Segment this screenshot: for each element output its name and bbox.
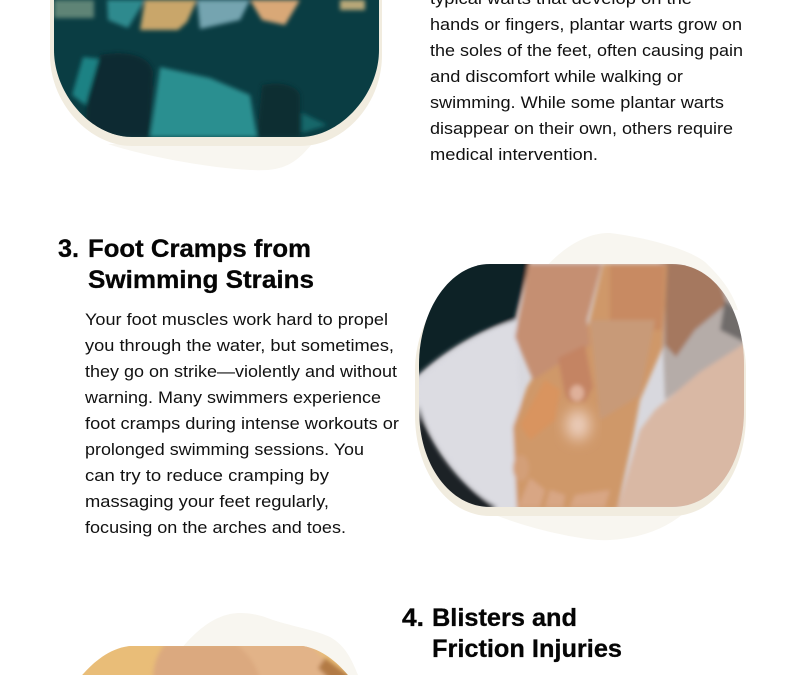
photo panel: swimmers' feet in pool xyxy=(50,0,385,170)
text block: foot cramps description: massaging your feet regularly, xyxy=(85,492,329,511)
text block: foot cramps description: you through the water, but sometimes, xyxy=(85,336,394,355)
cream blob below massage photo xyxy=(488,510,688,540)
text block: foot cramps description: foot cramps during intense workouts or xyxy=(85,414,399,433)
text block: foot cramps description: prolonged swimming sessions. You xyxy=(85,440,364,459)
cream blob above massage photo xyxy=(545,233,738,310)
text block: plantar warts description: disappear on their own, others require xyxy=(430,119,733,138)
text block: foot cramps description xyxy=(84,310,399,537)
heel highlight xyxy=(566,410,590,440)
heading: 4. Blisters and Friction Injuries: Blisters and xyxy=(432,604,577,632)
pool photo xyxy=(50,0,385,140)
text block: plantar warts description xyxy=(430,0,743,164)
heading: 4. Blisters and Friction Injuries xyxy=(402,604,622,663)
text block: foot cramps description: can try to reduce cramping by xyxy=(85,466,330,485)
text block: plantar warts description: the soles of the feet, often causing pain xyxy=(430,41,743,60)
heading: 3. Foot Cramps from Swimming Strains xyxy=(58,235,314,294)
heading: 4. Blisters and Friction Injuries: Friction Injuries xyxy=(432,635,622,663)
cream blob behind blisters photo xyxy=(180,613,358,675)
text block: foot cramps description: they go on strike—violently and without xyxy=(85,362,397,381)
heading: 3. Foot Cramps from Swimming Strains: Foot Cramps from xyxy=(88,235,311,263)
cream blob behind pool photo xyxy=(108,144,312,170)
heading: 3. Foot Cramps from Swimming Strains: Swimming Strains xyxy=(88,266,314,294)
massage photo xyxy=(415,260,750,510)
photo panel: foot massage xyxy=(415,233,750,540)
text block: plantar warts description: swimming. While some plantar warts xyxy=(430,93,724,112)
text block: foot cramps description: focusing on the arches and toes. xyxy=(85,518,346,537)
text block: plantar warts description: medical intervention. xyxy=(430,145,598,164)
cream frame behind pool photo xyxy=(50,0,382,146)
text block: plantar warts description: and discomfort while walking or xyxy=(430,67,683,86)
blisters photo xyxy=(82,646,348,675)
photo panel: blisters photo xyxy=(82,613,358,675)
cream frame behind massage photo xyxy=(415,270,746,516)
text block: foot cramps description: Your foot muscles work hard to propel xyxy=(85,310,388,329)
text block: foot cramps description: warning. Many swimmers experience xyxy=(84,388,381,407)
text block: plantar warts description: hands or fingers, plantar warts grow on xyxy=(430,15,742,34)
heading: 3. Foot Cramps from Swimming Strains: 3. xyxy=(58,235,79,263)
heading: 4. Blisters and Friction Injuries: 4. xyxy=(402,604,424,632)
